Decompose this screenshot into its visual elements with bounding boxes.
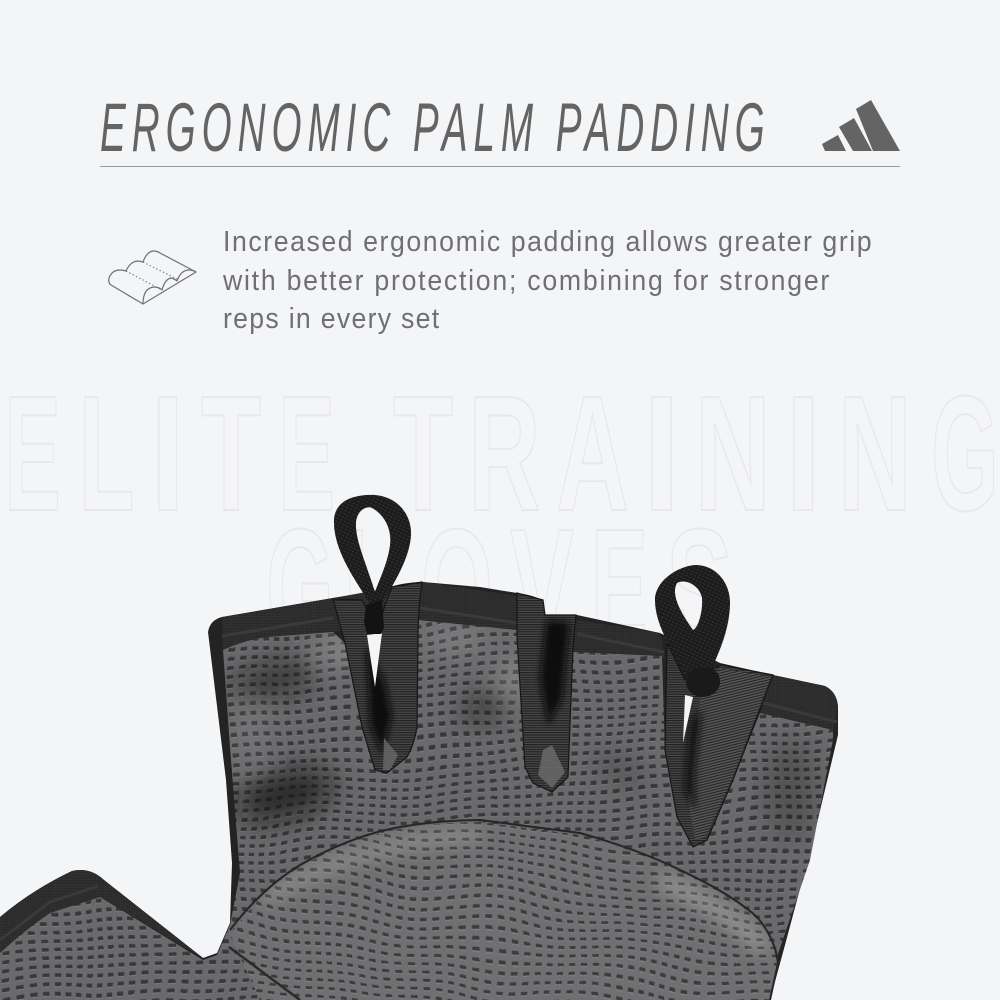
ghost text line: GLOVES — [266, 494, 733, 679]
ghost text line: ELITE TRAINING: E — [278, 362, 335, 545]
finger gap 3 opening — [683, 695, 693, 743]
description text — [222, 225, 872, 334]
cuff trim texture — [0, 582, 838, 958]
gusset 1 shadow — [366, 645, 392, 755]
ghost text line: GLOVES: V — [510, 495, 574, 678]
glove — [0, 495, 860, 1000]
ghost text line: ELITE TRAINING: I — [785, 362, 821, 546]
ghost text line: ELITE TRAINING — [4, 361, 999, 546]
palm mesh — [0, 600, 860, 1000]
finger loop 2 — [655, 565, 730, 697]
ghost text line: GLOVES: S — [666, 494, 733, 678]
ghost text line: ELITE TRAINING: I — [151, 362, 185, 545]
ghost text line: ELITE TRAINING: E — [4, 362, 61, 545]
loop 1 knot — [364, 600, 384, 634]
pad seam — [230, 820, 778, 1000]
gusset 2 tip highlight — [538, 745, 565, 788]
ghost text line: ELITE TRAINING: R — [468, 361, 540, 545]
finger gap 1 gusset — [333, 582, 422, 773]
title rule — [100, 166, 900, 167]
gusset 2 shadow — [540, 620, 570, 725]
ghost text line: GLOVES: E — [591, 495, 648, 678]
glove body silhouette — [0, 582, 838, 1000]
description line 1: Increased ergonomic padding allows greater grip — [223, 225, 872, 257]
gusset 3 shadow — [684, 710, 702, 810]
gusset 3 glossy panel — [688, 668, 771, 840]
loop 2 knot — [686, 667, 720, 697]
icon: adidas three bars logo — [822, 100, 900, 151]
palm shading — [227, 628, 816, 840]
ghost text line: ELITE TRAINING: A — [556, 362, 629, 545]
finger gap 1 opening — [367, 633, 382, 687]
raised palm pad — [230, 822, 777, 1000]
ghost text line: ELITE TRAINING: G — [931, 361, 999, 545]
ghost text line: GLOVES: L — [344, 495, 396, 678]
thumb seam — [229, 947, 300, 1000]
ghost text line: GLOVES: O — [421, 495, 493, 679]
ghost text line: ELITE TRAINING: N — [838, 361, 912, 545]
icon: padding layers — [109, 251, 196, 304]
finger gap 3 gusset — [665, 643, 773, 847]
background ghost outlined lettering — [4, 361, 999, 679]
title: ERGONOMIC PALM PADDING — [100, 88, 765, 166]
ghost text line: ELITE TRAINING: I — [643, 362, 681, 545]
pad highlight — [265, 835, 765, 950]
description line 3: reps in every set — [223, 302, 439, 334]
finger gap 2 gusset — [517, 593, 576, 792]
description line 2: with better protection; combining for stronger — [222, 264, 829, 296]
ghost text line: ELITE TRAINING: N — [695, 362, 771, 546]
ghost text line: ELITE TRAINING: L — [79, 363, 134, 546]
ghost text line: GLOVES: G — [266, 494, 334, 678]
gusset 1 tip highlight — [383, 738, 398, 770]
cuff seams — [0, 608, 837, 940]
ghost text line: ELITE TRAINING: T — [201, 362, 261, 545]
finger loop 1 — [334, 495, 411, 634]
ghost text line: ELITE TRAINING: T — [393, 362, 453, 545]
